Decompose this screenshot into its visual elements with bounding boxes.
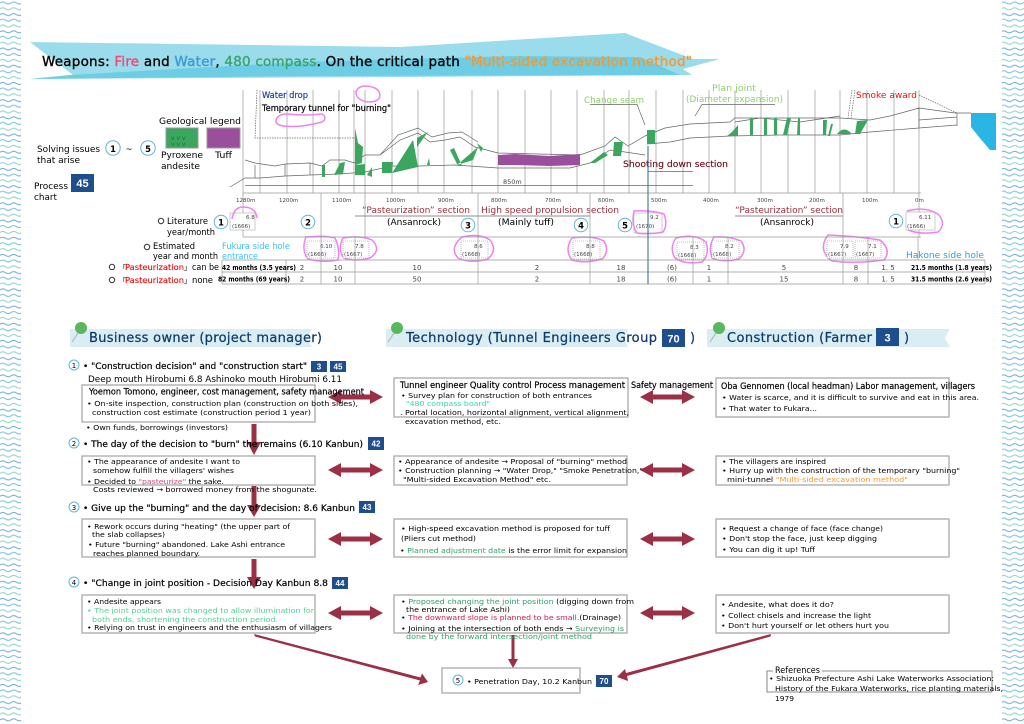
numbered stage markers: 3 (465, 220, 471, 230)
estimated date boxes: 8.3 (690, 245, 699, 251)
distance ruler labels: 500m (651, 198, 667, 204)
arrow: down 3 (247, 559, 261, 589)
label: temporary tunnel: Temporary tunnel for "burning" (261, 104, 391, 114)
label: change seam (584, 96, 645, 125)
column header: construction: ) (904, 331, 909, 346)
stage 2 business owner: • The appearance of andesite I want to (87, 457, 241, 466)
row: pasteurization none: 」 (184, 277, 191, 285)
distance ruler labels: 1100m (332, 198, 351, 204)
row: pasteurization can be: 21.5 months (1.8 years) (911, 264, 992, 272)
row: pasteurization none: 31.5 months (2.6 years) (911, 276, 992, 284)
row: pasteurization can be: 1 (707, 264, 711, 272)
stage 1 technology: Safety management (631, 381, 714, 391)
estimated date boxes: (1668) (678, 253, 696, 259)
literature label: Literature (167, 216, 208, 226)
geological legend: Geological legend (159, 116, 241, 126)
double arrows: row 4 (328, 606, 695, 620)
stage 2 business owner: 42 (372, 440, 381, 448)
fukura side hole (222, 242, 290, 262)
flow arrows (247, 390, 771, 685)
stage 3 technology: • High-speed excavation method is proposed for tuff (401, 524, 611, 533)
row: pasteurization none: 18 (617, 276, 625, 284)
stage 3 business owner (69, 501, 375, 558)
pasteurization section 2: “Pasteurization” section (735, 206, 843, 216)
hakone side hole: Hakone side hole (906, 251, 984, 261)
stage 4 technology: • Proposed changing the joint position (digging down from (401, 597, 634, 606)
estimated date boxes: 8.8 (586, 244, 595, 250)
estimated date boxes: 7.8 (355, 244, 364, 250)
stage 3 business owner: • Future "burning" abandoned. Lake Ashi entrance (88, 540, 285, 549)
solving issues key: ~ (125, 144, 133, 154)
row: pasteurization none: 2 (300, 276, 304, 284)
legend swatch: pyroxene andesite (161, 128, 203, 171)
stage 4 business owner: both ends, shortening the construction period. (92, 615, 278, 624)
title banner (30, 33, 720, 79)
stage 2 business owner: 2 (72, 440, 76, 448)
estimated date boxes: 7.9 (840, 244, 849, 250)
stage 1 business owner: 3 (317, 362, 322, 372)
stage 1 technology: Tunnel engineer Quality control Process management (399, 381, 626, 391)
column header: technology: Technology (Tunnel Engineers Group (405, 331, 657, 346)
stage 1 construction: • Water is scarce, and it is difficult to survive and eat in this area. (722, 393, 979, 402)
row: pasteurization none: (6) (667, 276, 677, 284)
row: pasteurization can be: Pasteurization (125, 263, 184, 272)
distance bar 850m: 850m (503, 178, 522, 186)
stage 4 technology: • Joining at the intersection of both ends → Surveying is (401, 624, 624, 633)
numbered stage markers: 1 (218, 218, 224, 228)
row: pasteurization can be: can be (192, 262, 219, 272)
numbered stage markers (214, 214, 903, 232)
section labels row (355, 206, 843, 227)
row: pasteurization none: 1. 5 (881, 276, 895, 284)
dashed temporary tunnel frame (255, 90, 355, 138)
numbered stage markers: 5 (622, 220, 628, 230)
label: change seam: Change seam (584, 96, 644, 106)
geological legend (159, 116, 241, 171)
distance ruler labels: 1280m (236, 198, 255, 204)
row: pasteurization can be: 「 (119, 264, 126, 272)
solving issues key: 5 (145, 144, 151, 154)
distance ruler labels: 1000m (386, 198, 405, 204)
label: water drop: Water drop (262, 91, 308, 101)
stage boxes background (82, 378, 949, 633)
solving issues key: that arise (37, 155, 80, 165)
row: pasteurization can be: 10 (413, 264, 421, 272)
literature date boxes (230, 207, 942, 234)
row: pasteurization can be: 10 (334, 264, 342, 272)
estimated date boxes: 6.10 (320, 244, 333, 250)
row: pasteurization none: none (192, 275, 213, 285)
stage 1 business owner: • On-site inspection, construction plan (construction on both sides), (87, 399, 358, 408)
estimated date boxes: (1668) (462, 252, 480, 258)
stage 3 business owner: • Rework occurs during "heating" (the upper part of (87, 522, 290, 531)
stage 4 construction (721, 600, 889, 630)
estimated label: Estimated (153, 241, 195, 251)
row: pasteurization can be: 1. 5 (881, 264, 895, 272)
column header: business owner (70, 322, 322, 347)
stage 3 construction (722, 524, 883, 554)
estimated date boxes: (1667) (856, 252, 874, 258)
stage 1 technology: excavation method, etc. (405, 417, 501, 426)
stage 3 construction: • You can dig it up! Tuff (722, 545, 816, 554)
process chart key (34, 174, 94, 202)
legend swatch: pyroxene andesite: v v v (171, 141, 186, 148)
stage 1 business owner: construction cost estimate (construction period 1 year) (92, 408, 311, 417)
double arrows: row 3 (328, 532, 695, 546)
row: pasteurization none: 「 (119, 277, 126, 285)
distance ruler labels: 1200m (279, 198, 298, 204)
solving issues key (37, 141, 155, 165)
stage 1 business owner (69, 360, 365, 432)
row: pasteurization none: 10 (334, 276, 342, 284)
stage 3 technology (400, 524, 627, 555)
label: plan joint (686, 84, 783, 116)
stage 4 technology: done by the forward intersection/joint method (406, 632, 592, 641)
stage 2 business owner: somehow fulfill the villagers' wishes (93, 466, 234, 475)
stage 2 business owner: Costs reviewed → borrowed money from the shogunate. (93, 485, 317, 494)
stage 3 business owner: 43 (363, 503, 372, 512)
column header: construction: 3 (884, 332, 891, 344)
date row labels (144, 216, 984, 262)
legend swatch: pyroxene andesite: andesite (161, 161, 200, 171)
stage 3 technology: (Pliers cut method) (401, 534, 476, 543)
process chart key: Process (34, 181, 68, 191)
fukura side hole: entrance (222, 252, 258, 262)
tunnel terrain lines (230, 108, 971, 187)
stage 1 business owner: 1 (72, 362, 76, 370)
process chart key: chart (34, 192, 58, 202)
arrow: down 1 (247, 424, 261, 455)
wave border right (1002, 0, 1024, 724)
distance ruler labels: 400m (703, 198, 719, 204)
geological profile chart (230, 84, 996, 237)
reservoir (971, 113, 996, 150)
references: References (775, 665, 820, 675)
row: pasteurization can be: 18 (617, 264, 625, 272)
literature date boxes: 6.11 (919, 215, 931, 221)
arrow: right diagonal (617, 634, 771, 681)
stage 2 construction: mini-tunnel "Multi-sided excavation method" (727, 475, 908, 484)
stage 5 penetration day: 70 (600, 677, 609, 686)
estimated date boxes: (1668) (713, 252, 731, 258)
numbered stage markers: 2 (305, 218, 311, 228)
row: pasteurization can be: 」 (184, 264, 191, 272)
stage 1 business owner: • "Construction decision" and "construction start" (83, 362, 307, 372)
stage 4 business owner: • Relying on trust in engineers and the enthusiasm of villagers (87, 623, 332, 632)
high speed section (478, 206, 619, 227)
stage 3 construction: • Request a change of face (face change) (722, 524, 883, 533)
distance ruler labels: 700m (545, 198, 561, 204)
stage 2 technology: • Construction planning → "Water Drop," "Smoke Penetration," (398, 466, 643, 475)
row: pasteurization can be: 2 (535, 264, 539, 272)
estimated label (144, 241, 218, 261)
estimated label: year and month (153, 251, 218, 261)
stage 3 construction: • Don't stop the face, just keep digging (722, 534, 877, 543)
wave border left (0, 0, 21, 724)
column header: technology (386, 322, 695, 347)
estimated date boxes: 8.6 (474, 244, 483, 250)
literature date boxes: (1666) (907, 224, 925, 230)
legend swatch: pyroxene andesite: v v v (171, 135, 186, 142)
stage 4 business owner: • The joint position was changed to allow illumination for (87, 606, 315, 615)
stage 5 penetration day: 5 (456, 677, 460, 685)
stage 4 business owner (69, 577, 348, 632)
stage 3 business owner: the slab collapses) (92, 530, 165, 539)
distance ruler labels (236, 198, 924, 204)
literature date boxes: 6.8 (246, 215, 255, 221)
literature date boxes: (1670) (636, 224, 654, 230)
stage 3 technology: • Planned adjustment date is the error limit for expansion (400, 546, 627, 555)
column header: technology: ) (690, 331, 695, 346)
arrow: center down (508, 635, 518, 668)
references: • Shizuoka Prefecture Ashi Lake Waterworks Association: (769, 674, 994, 683)
row: pasteurization can be: 2 (300, 264, 304, 272)
stage 1 technology: "480 compass board" (406, 399, 490, 408)
stage 2 construction: • The villagers are inspired (722, 457, 826, 466)
legend swatch: pyroxene andesite: Pyroxene (161, 150, 203, 160)
row: pasteurization none: 82 months (69 years) (218, 276, 290, 284)
row: pasteurization none: 1 (707, 276, 711, 284)
double arrows: row 2 (328, 463, 695, 477)
stage 1 technology: . Portal location, horizontal alignment, vertical alignment, (400, 408, 629, 417)
stage 1 construction (721, 382, 979, 413)
stage 4 technology (401, 597, 634, 641)
stage 4 business owner: 44 (336, 579, 345, 588)
literature label: year/month (167, 227, 215, 237)
title text: Weapons: Fire and Water, 480 compass. On the critical path "Multi-sided excavation method" (42, 54, 692, 70)
row: pasteurization can be (109, 262, 992, 272)
row: pasteurization none (109, 275, 992, 285)
row: pasteurization none: 2 (535, 276, 539, 284)
row: pasteurization can be: 42 months (3.5 years) (222, 264, 296, 272)
stage 1 construction: Oba Gennomen (local headman) Labor management, villagers (721, 382, 975, 392)
pink mark: water drop (356, 86, 380, 102)
literature label (158, 216, 215, 237)
label: plan joint: (Diameter expansion) (686, 95, 783, 105)
stage 2 technology: • Appearance of andesite → Proposal of "burning" method (398, 457, 627, 466)
pasteurization section 1: (Ansanrock) (387, 217, 441, 227)
row: pasteurization none: Pasteurization (125, 276, 184, 285)
stage 1 technology: • Survey plan for construction of both entrances (401, 391, 592, 400)
stage 2 construction (722, 457, 960, 484)
blue tunnel meeting line (647, 146, 649, 284)
pasteurization section 2 (735, 206, 843, 227)
stage 1 construction: • That water to Fukara... (722, 404, 817, 413)
stage 2 technology (398, 457, 643, 484)
estimated date boxes: (1667) (828, 252, 846, 258)
stage 3 business owner: 3 (72, 504, 76, 512)
distance ruler labels: 600m (598, 198, 614, 204)
pink mark: temporary tunnel (276, 114, 325, 126)
stage 4 construction: • Don't hurt yourself or let others hurt you (721, 621, 889, 630)
grid lines (243, 90, 921, 237)
pasteurization section 2: (Ansanrock) (760, 217, 814, 227)
stage 4 business owner: 4 (72, 579, 77, 587)
distance ruler labels: 800m (491, 198, 507, 204)
process chart key: 45 (76, 178, 89, 190)
solving issues key: Solving issues (37, 144, 100, 154)
construction duration table (109, 146, 992, 285)
stage 3 business owner: • Give up the "burning" and the day of decision: 8.6 Kanbun (83, 504, 355, 514)
distance ruler labels: 900m (438, 198, 454, 204)
estimated date boxes: 8.2 (725, 244, 734, 250)
estimated date boxes: 7.1 (868, 244, 877, 250)
distance ruler labels: 300m (757, 198, 773, 204)
column header: technology: 70 (667, 334, 680, 346)
high speed section: High speed propulsion section (481, 206, 619, 216)
stage 1 business owner: • Own funds, borrowings (investors) (86, 423, 228, 432)
literature date boxes: (1666) (232, 224, 250, 230)
estimated date boxes: (1668) (574, 252, 592, 258)
literature date boxes: 9.2 (650, 215, 659, 221)
legend swatch: tuff: Tuff (214, 150, 232, 160)
column header: construction (707, 322, 950, 347)
double arrows: row 1 (328, 390, 695, 404)
distance ruler labels: 0m (915, 198, 924, 204)
pasteurization section 1: “Pasteurization” section (362, 206, 470, 216)
stage 4 technology: the entrance of Lake Ashi) (406, 605, 510, 614)
row: pasteurization none: 8 (854, 276, 858, 284)
references (767, 665, 1003, 703)
stage 2 technology: "Multi-sided Excavation Method" etc. (403, 475, 551, 484)
label: plan joint: Plan joint (712, 84, 756, 94)
stage 4 construction: • Andesite, what does it do? (721, 600, 834, 609)
label: smoke award: Smoke award (856, 91, 917, 101)
arrow: down 2 (247, 486, 261, 517)
stage 4 business owner: • "Change in joint position - Decision Day Kanbun 8.8 (83, 579, 328, 589)
numbered stage markers: 1 (893, 216, 899, 226)
stage 4 construction: • Collect chisels and increase the light (721, 611, 871, 620)
fukura side hole: Fukura side hole (222, 242, 290, 252)
stage 5 penetration day (442, 668, 612, 693)
stage 2 business owner (69, 437, 384, 494)
geology: pyroxene andesite (322, 118, 868, 177)
stage 1 business owner: Yoemon Tomono, engineer, cost management, safety management (88, 388, 365, 398)
estimated date boxes: (1667) (344, 252, 362, 258)
row: pasteurization none: 15 (780, 276, 788, 284)
stage 1 business owner: 45 (334, 362, 343, 372)
stage 2 construction: • Hurry up with the construction of the temporary "burning" (722, 466, 960, 475)
row: pasteurization can be: 5 (782, 264, 786, 272)
arrow: left diagonal (254, 634, 428, 685)
distance ruler labels: 100m (862, 198, 878, 204)
column header: construction: Construction (Farmer (727, 331, 873, 346)
row: pasteurization can be: 8 (854, 264, 858, 272)
estimated date boxes (304, 235, 887, 263)
stage 2 business owner: • The day of the decision to "burn" the remains (6.10 Kanbun) (83, 440, 363, 450)
stage 4 technology: • The downward slope is planned to be small. (Drainage) (401, 613, 621, 622)
label: shooting down section: Shooting down section (623, 160, 728, 170)
stage 1 technology (399, 381, 714, 426)
stage 5 penetration day: • Penetration Day, 10.2 Kanbun (467, 677, 592, 686)
estimated date boxes: (1666) (308, 252, 326, 258)
distance ruler labels: 200m (809, 198, 825, 204)
stage 4 business owner: • Andesite appears (87, 597, 161, 606)
column header: business owner: Business owner (project manager) (89, 331, 322, 346)
references: 1979 (775, 694, 794, 703)
numbered stage markers: 4 (578, 220, 584, 230)
references: History of the Fukara Waterworks, rice planting materials, (775, 684, 1003, 693)
row: pasteurization can be: (6) (667, 264, 677, 272)
geology: tuff (498, 154, 580, 166)
row: pasteurization none: 50 (413, 276, 421, 284)
stage 1 business owner: Deep mouth Hirobumi 6.8 Ashinoko mouth Hirobumi 6.11 (88, 374, 342, 384)
solving issues key: 1 (110, 144, 116, 154)
pasteurization section 1 (355, 206, 478, 227)
high speed section: (Mainly tuff) (498, 217, 554, 227)
stage 2 business owner: • Decided to "pasteurize" the sake. (87, 477, 224, 486)
stage 3 business owner: reaches planned boundary. (93, 549, 200, 558)
